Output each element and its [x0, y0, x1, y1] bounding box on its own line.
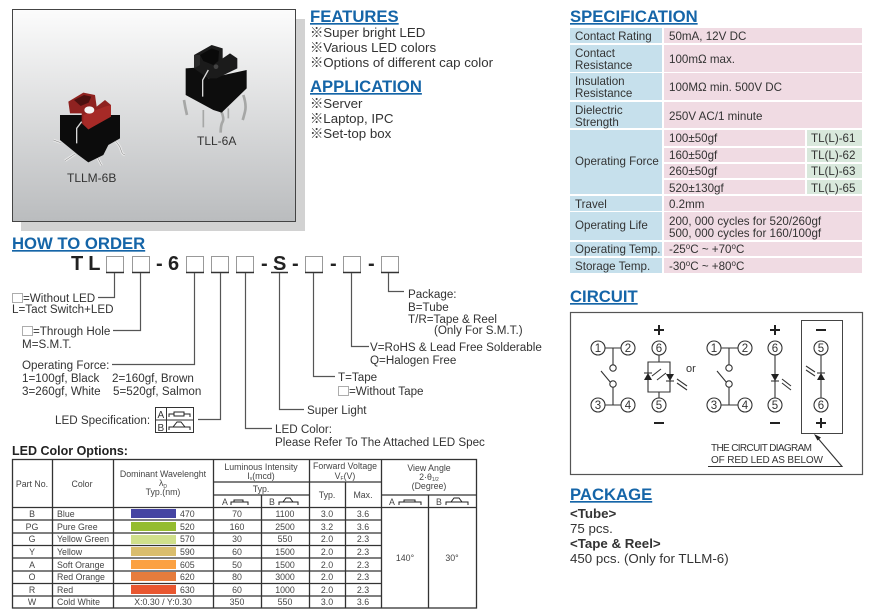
row: Cold White: 550: [278, 597, 292, 607]
row: Yellow Green: 2.0: [321, 534, 333, 544]
row: Yellow Green: 2.3: [357, 534, 369, 544]
view angle values: [396, 553, 459, 563]
table header: Max.: [353, 490, 373, 500]
spec left labels: Operating Life: [575, 219, 648, 232]
table header: B: [269, 497, 275, 507]
order option: RoHS: V=RoHS & Lead Free Solderable: [370, 341, 542, 354]
circuit: dual LED: 5: [656, 400, 662, 412]
circuit: dual LED: [644, 325, 687, 423]
circuit: dual LED: 6: [656, 343, 662, 355]
order option: tape: T=Tape: [338, 371, 377, 384]
row: Soft Orange: 605: [180, 560, 195, 570]
row: Pure Green: 3.2: [321, 522, 333, 532]
row: Red Orange: O: [29, 572, 36, 582]
part code cells: [807, 130, 862, 194]
row: Cold White: Cold White: [57, 597, 100, 607]
table header: 1/2: [432, 477, 439, 483]
row: Red: R: [29, 585, 35, 595]
row: Red: Red: [57, 585, 73, 595]
row: Pure Green: 3.6: [357, 522, 369, 532]
heading: specification: SPECIFICATION: [570, 7, 698, 26]
table header: (mcd): [252, 471, 275, 481]
spec left labels: Dielectric: [575, 104, 623, 117]
table header: v: [250, 476, 253, 482]
circuit: red LED: [802, 320, 842, 434]
row: Red Orange: [29, 572, 369, 582]
spec values: C ~ +70: [690, 243, 731, 256]
order option: tape: =Without Tape: [349, 385, 424, 398]
callout: red LED note: THE CIRCUIT DIAGRAM: [711, 443, 812, 454]
spec left labels: Strength: [575, 116, 619, 129]
row: Pure Green: [26, 522, 369, 532]
row: Red Orange: 80: [232, 572, 242, 582]
panel: product photo: [12, 10, 305, 231]
part number code: -: [368, 253, 375, 275]
circuit: single LED: [768, 325, 791, 423]
order option: package: B=Tube: [408, 301, 449, 314]
circuit: red LED: 6: [818, 400, 824, 412]
order option: super light: Super Light: [307, 404, 367, 417]
order option: RoHS: [370, 341, 542, 367]
circuit: switch 1: 3: [595, 400, 601, 412]
row: Red: [29, 585, 369, 595]
row: Pure Green: 2500: [275, 522, 295, 532]
part number code: -: [292, 253, 299, 275]
row: Red: 1000: [275, 585, 295, 595]
part number code: S: [273, 253, 286, 275]
label: or: or: [686, 363, 696, 375]
order option: operating force: 3=260gf, White: [22, 385, 101, 398]
order option: LED: L=Tact Switch+LED: [12, 303, 114, 316]
circuit: single LED: 6: [772, 343, 778, 355]
order option: LED color: LED Color:: [275, 423, 332, 436]
order option: package: (Only For S.M.T.): [434, 324, 523, 337]
table: specification: [570, 28, 862, 273]
row: Red: 2.0: [321, 585, 333, 595]
table header: V: [335, 471, 341, 481]
order option: tape: [338, 371, 424, 398]
package text: 450 pcs. (Only for TLLM-6): [570, 551, 729, 566]
table header: Dominant Wavelenght: [120, 469, 207, 479]
features list: ※Various LED colors: [310, 40, 436, 55]
row: Yellow Green: 30: [232, 534, 242, 544]
row: Yellow Green: 570: [180, 534, 195, 544]
table header: View Angle: [407, 463, 451, 473]
package text: [570, 506, 729, 566]
panel: circuit diagram: [570, 312, 862, 474]
row: Yellow: 590: [180, 547, 195, 557]
spec values: 250V AC/1 minute: [669, 110, 762, 123]
table header: Forward Voltage: [313, 461, 377, 471]
row: Red: 2.3: [357, 585, 369, 595]
row: Yellow Green: 550: [278, 534, 292, 544]
order option: operating force: 1=100gf, Black: [22, 372, 100, 385]
row: Blue: 470: [180, 509, 195, 519]
spec left labels: Storage Temp.: [575, 260, 650, 273]
part number code: [71, 253, 399, 275]
part number code: -: [261, 253, 268, 275]
spec left labels: [575, 30, 660, 273]
row: Red Orange: 2.0: [321, 572, 333, 582]
table header: F: [341, 476, 344, 482]
callout: red LED note: [708, 434, 842, 466]
spec values: 200, 000 cycles for 520/260gf: [669, 215, 822, 228]
row: Cold White: W: [28, 597, 37, 607]
row: Yellow Green: G: [29, 534, 36, 544]
spec values: 50mA, 12V DC: [669, 30, 746, 43]
row: Red Orange: 3000: [275, 572, 295, 582]
spec values: TL(L)-65: [811, 182, 855, 195]
row: Yellow: [29, 547, 369, 557]
spec left column cells: [570, 28, 662, 273]
product: TLL-6A switch: [184, 45, 247, 133]
row: Yellow: 60: [232, 547, 242, 557]
order option: operating force: Operating Force:: [22, 359, 109, 372]
circuit: switch 2: 3: [711, 400, 717, 412]
order option: package: Package:: [408, 288, 457, 301]
row: Soft Orange: 50: [232, 560, 242, 570]
order option: mounting: M=S.M.T.: [22, 338, 71, 351]
row: Yellow: Y: [29, 547, 35, 557]
spec values: -30: [669, 260, 686, 273]
spec left labels: Operating Temp.: [575, 243, 660, 256]
spec values: C ~ +80: [690, 260, 731, 273]
order option: RoHS: Q=Halogen Free: [370, 354, 456, 367]
callout: red LED note: OF RED LED AS BELOW: [711, 455, 824, 466]
view angle values: 30°: [445, 553, 459, 563]
heading: package: PACKAGE: [570, 485, 652, 504]
spec values: 260±50gf: [669, 165, 718, 178]
heading: LED color options: LED Color Options:: [12, 444, 128, 458]
spec values: o: [731, 259, 736, 268]
table header: D: [163, 484, 167, 490]
spec values: 0.2mm: [669, 198, 704, 211]
table header: (Degree): [412, 481, 446, 491]
row: Cold White: 3.6: [357, 597, 369, 607]
features list: ※Options of different cap color: [310, 55, 494, 70]
order option: LED specification: A: [158, 410, 164, 421]
spec values: C: [736, 243, 744, 256]
spec values: o: [731, 242, 736, 251]
row: Pure Green: PG: [26, 522, 39, 532]
order option: operating force: 5=520gf, Salmon: [113, 385, 201, 398]
order option: mounting: [22, 325, 110, 351]
order option: LED: =Without LED: [23, 292, 95, 305]
view angle values: 140°: [396, 553, 414, 563]
circuit: switch 2: 1: [711, 343, 717, 355]
circuit: switch 2: [707, 341, 752, 412]
heading: circuit: CIRCUIT: [570, 287, 638, 306]
spec values: 100MΩ min. 500V DC: [669, 81, 782, 94]
part number code: -: [156, 253, 163, 275]
leader lines: [98, 273, 404, 428]
spec right column cells: [664, 28, 862, 273]
circuit: red LED: 5: [818, 343, 824, 355]
spec left labels: Resistance: [575, 87, 632, 100]
row: Yellow Green: Yellow Green: [57, 534, 109, 544]
row: Soft Orange: [29, 560, 369, 570]
spec left labels: Operating Force: [575, 155, 659, 168]
application list: ※Laptop, IPC: [310, 111, 394, 126]
table header: Typ.(nm): [146, 487, 180, 497]
spec left labels: Insulation: [575, 75, 625, 88]
circuit: single LED: 5: [772, 400, 778, 412]
row: Red: 630: [180, 585, 195, 595]
heading: features: FEATURES: [310, 7, 399, 26]
circuit: switch 1: 2: [625, 343, 631, 355]
spec values: o: [686, 242, 691, 251]
table header: B: [436, 497, 442, 507]
spec values: 520±130gf: [669, 182, 724, 195]
table header: A: [389, 497, 395, 507]
order option: operating force: 2=160gf, Brown: [112, 372, 194, 385]
table header: Color: [71, 479, 93, 489]
table header: λ: [159, 478, 163, 488]
table header: Typ.: [253, 484, 269, 494]
spec left labels: Resistance: [575, 59, 632, 72]
order option: operating force: [22, 359, 201, 398]
order option: LED: [12, 292, 114, 316]
spec values: [669, 30, 855, 273]
spec values: 500, 000 cycles for 160/100gf: [669, 227, 822, 240]
row: Pure Green: 160: [230, 522, 244, 532]
label: TLL-6A: TLL-6A: [197, 134, 236, 148]
heading: how to order: HOW TO ORDER: [12, 234, 145, 253]
order option: LED color: [275, 423, 485, 449]
order option: LED specification: [55, 408, 194, 434]
order option: package: [408, 288, 523, 337]
table header: Typ.: [319, 490, 335, 500]
package text: <Tape & Reel>: [570, 536, 661, 551]
heading: application: APPLICATION: [310, 77, 422, 96]
package text: <Tube>: [570, 506, 617, 521]
package text: 75 pcs.: [570, 521, 613, 536]
spec values: -25: [669, 243, 686, 256]
row: Cold White: 350: [230, 597, 244, 607]
label: TLLM-6B: TLLM-6B: [67, 171, 116, 185]
row: Soft Orange: Soft Orange: [57, 560, 105, 570]
row: Blue: 1100: [276, 509, 295, 519]
row: Soft Orange: 2.0: [321, 560, 333, 570]
spec left labels: Travel: [575, 198, 607, 211]
spec values: TL(L)-62: [811, 149, 855, 162]
features list: [310, 25, 494, 70]
row: Yellow: Yellow: [57, 547, 83, 557]
part number code: -: [330, 253, 337, 275]
table header: Part No.: [16, 479, 48, 489]
table header: 2·θ: [419, 472, 432, 482]
row: Yellow: 1500: [275, 547, 295, 557]
circuit: switch 2: 4: [742, 400, 749, 412]
row: Red Orange: 2.3: [357, 572, 369, 582]
row: Red Orange: 620: [180, 572, 195, 582]
row: Red: 60: [232, 585, 242, 595]
spec values: 160±50gf: [669, 149, 718, 162]
circuit: switch 2: 2: [742, 343, 748, 355]
table: LED color options: [12, 460, 476, 608]
application list: ※Set-top box: [310, 126, 392, 141]
row: Blue: [29, 509, 369, 519]
spec left labels: Contact Rating: [575, 30, 652, 43]
row: Cold White: [28, 597, 369, 607]
circuit: switch 1: 1: [595, 343, 601, 355]
order option: mounting: =Through Hole: [33, 325, 110, 338]
spec values: TL(L)-61: [811, 132, 855, 145]
row: Cold White: X:0.30 / Y:0.30: [134, 597, 192, 607]
table header: A: [222, 497, 228, 507]
row: Blue: B: [29, 509, 35, 519]
spec values: TL(L)-63: [811, 165, 855, 178]
application list: [310, 96, 394, 141]
row: Soft Orange: 2.3: [357, 560, 369, 570]
product: TLLM-6B switch: [53, 93, 125, 165]
order option: LED color: Please Refer To The Attached LED Spec: [275, 436, 485, 449]
features list: ※Super bright LED: [310, 25, 425, 40]
spec left labels: Contact: [575, 47, 616, 60]
circuit: switch 1: [591, 341, 635, 412]
row: Soft Orange: 1500: [275, 560, 295, 570]
table header: Luminous Intensity: [224, 462, 298, 472]
row: Yellow: 2.3: [357, 547, 369, 557]
table grid: [12, 460, 476, 608]
table header: I: [247, 471, 250, 481]
row: Yellow Green: [29, 534, 369, 544]
order option: LED specification: LED Specification:: [55, 414, 150, 427]
table header: [16, 461, 468, 507]
part number code: TL: [71, 253, 105, 275]
circuit: switch 1: 4: [625, 400, 632, 412]
row: Pure Green: 520: [180, 522, 195, 532]
spec values: C: [736, 260, 744, 273]
application list: ※Server: [310, 96, 363, 111]
row: Red Orange: Red Orange: [57, 572, 105, 582]
row: Cold White: 3.0: [321, 597, 333, 607]
row: Blue: Blue: [57, 509, 75, 519]
row: Yellow: 2.0: [321, 547, 333, 557]
spec values: 100±50gf: [669, 132, 718, 145]
part number code: 6: [168, 253, 179, 275]
row: Soft Orange: A: [29, 560, 35, 570]
row: Blue: 3.6: [357, 509, 369, 519]
row: Blue: 3.0: [321, 509, 333, 519]
order option: package: T/R=Tape & Reel: [408, 313, 497, 326]
spec values: o: [686, 259, 691, 268]
row: Blue: 70: [232, 509, 242, 519]
table header: (V): [344, 471, 355, 481]
order option: LED specification: B: [158, 423, 164, 434]
spec values: 100mΩ max.: [669, 53, 735, 66]
row: Pure Green: Pure Gree: [57, 522, 98, 532]
